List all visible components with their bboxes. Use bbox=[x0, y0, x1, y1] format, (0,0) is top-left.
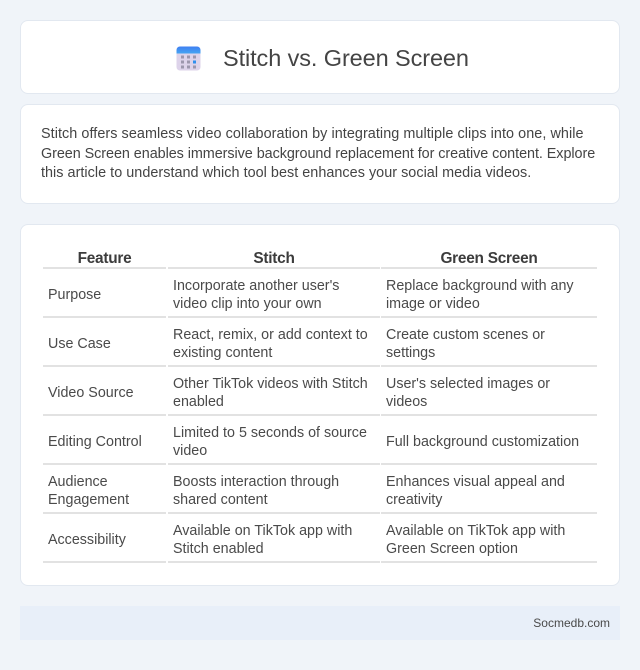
comparison table: Enhances visual appeal and bbox=[386, 474, 565, 490]
comparison table: shared content bbox=[173, 492, 268, 508]
comparison table: Limited to 5 seconds of source bbox=[173, 425, 367, 441]
comparison table: videos bbox=[386, 394, 427, 410]
comparison table: Audience bbox=[48, 474, 108, 490]
comparison table: settings bbox=[386, 345, 435, 361]
comparison table: video clip into your own bbox=[173, 296, 322, 312]
comparison table: Create custom scenes or bbox=[386, 327, 545, 343]
title: Stitch vs. Green Screen bbox=[223, 45, 469, 71]
intro text: Green Screen enables immersive background replacement for creative content. Explore bbox=[41, 146, 595, 162]
comparison table: Purpose bbox=[48, 287, 101, 303]
panel: title card bbox=[20, 20, 620, 94]
comparison table: enabled bbox=[173, 394, 224, 410]
comparison table: Full background customization bbox=[386, 434, 579, 450]
comparison table: React, remix, or add context to bbox=[173, 327, 368, 343]
comparison table: Available on TikTok app with bbox=[173, 523, 352, 539]
row: Purpose bbox=[48, 278, 574, 312]
comparison table: Stitch enabled bbox=[173, 541, 264, 557]
row: Editing Control bbox=[48, 425, 579, 459]
comparison table: Engagement bbox=[48, 492, 129, 508]
row: Use Case bbox=[48, 327, 545, 361]
comparison table: User's selected images or bbox=[386, 376, 550, 392]
comparison table: Green Screen option bbox=[386, 541, 518, 557]
comparison table: Use Case bbox=[48, 336, 111, 352]
comparison table: creativity bbox=[386, 492, 442, 508]
intro text: Stitch offers seamless video collaboration by integrating multiple clips into one, while bbox=[41, 126, 584, 142]
comparison table: Video Source bbox=[48, 385, 134, 401]
footer bar bbox=[20, 606, 620, 640]
header: Feature: Feature bbox=[78, 250, 131, 267]
comparison table: Incorporate another user's bbox=[173, 278, 339, 294]
comparison table: existing content bbox=[173, 345, 272, 361]
row: Audience Engagement bbox=[48, 474, 565, 508]
comparison table: Replace background with any bbox=[386, 278, 574, 294]
row: Accessibility bbox=[48, 523, 565, 557]
header: Green Screen: Green Screen bbox=[440, 250, 538, 267]
comparison table: Available on TikTok app with bbox=[386, 523, 565, 539]
comparison table: Boosts interaction through bbox=[173, 474, 339, 490]
icon: calendar bbox=[176, 46, 200, 70]
intro text: this article to understand which tool best enhances your social media videos. bbox=[41, 165, 531, 181]
panel: introduction bbox=[20, 104, 620, 204]
header: Stitch: Stitch bbox=[253, 250, 295, 267]
intro text bbox=[41, 126, 595, 181]
comparison table: image or video bbox=[386, 296, 480, 312]
comparison table: Other TikTok videos with Stitch bbox=[173, 376, 368, 392]
comparison table: Editing Control bbox=[48, 434, 142, 450]
panel: comparison table bbox=[20, 224, 620, 586]
comparison table: video bbox=[173, 443, 207, 459]
footer text: Socmedb.com: Socmedb.com bbox=[533, 616, 610, 630]
comparison table: Accessibility bbox=[48, 532, 126, 548]
row: Video Source bbox=[48, 376, 550, 410]
